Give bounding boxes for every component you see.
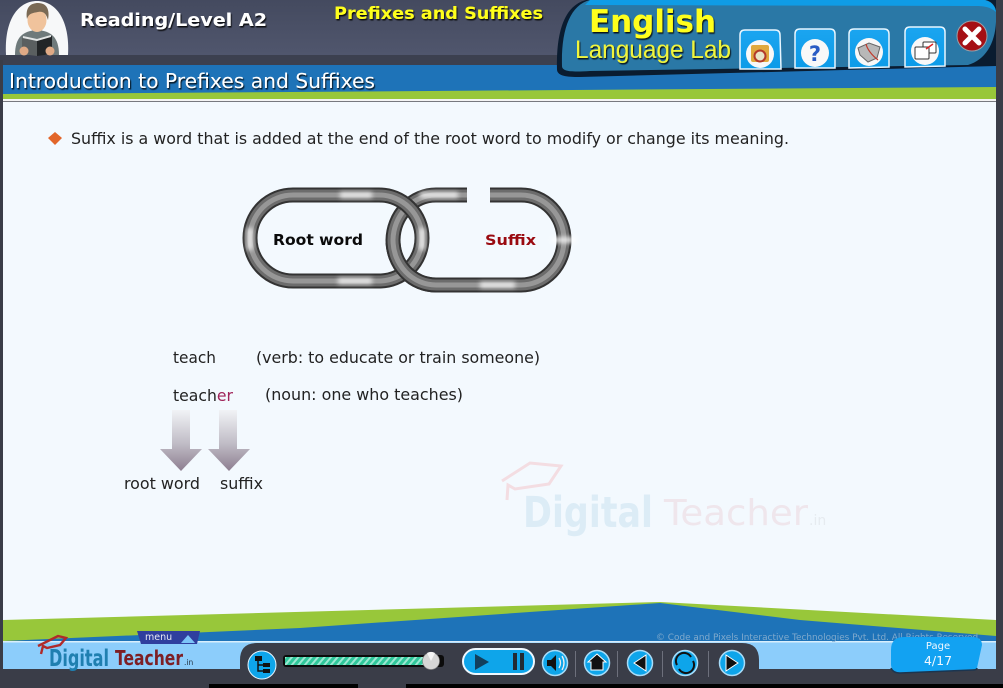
top header bar [0,0,1003,55]
page number: 4/17 [924,653,952,668]
icon: window button [905,27,945,67]
menu tab: menu [145,632,172,643]
digital teacher logo: Teacher [115,646,183,670]
heading: prefixes and suffixes: Prefixes and Suffixes [334,4,543,23]
copyright text: © Code and Pixels Interactive Technologies Pvt. Ltd. All Rights Reserved. [656,633,981,643]
digital teacher logo: .in [184,658,193,667]
icon: replay button [672,650,698,676]
media control bar [240,643,759,679]
icon: next button [720,650,744,676]
icon: student reading avatar [6,1,68,56]
bottom dark band [0,669,1003,683]
icon: close button [957,21,987,51]
chain link diagram [250,195,576,285]
icon: help button [795,29,835,68]
icon: previous button [628,650,652,676]
watermark logo: .in [809,513,826,529]
title banner [3,65,996,102]
left chain link: root word [250,195,422,281]
english language lab badge [557,0,996,77]
left frame edge [0,60,3,684]
heading: introduction: Introduction to Prefixes and Suffixes [9,69,375,93]
interlocked front section of right link [386,243,436,292]
heading: reading level: Reading/Level A2 [80,11,267,31]
label: root word: Root word [273,231,363,249]
example: teach definition: (verb: to educate or train someone) [256,349,540,367]
icon: volume button [542,650,568,676]
definition text: Suffix is a word that is added at the end of the root word to modify or change its meaning. [71,130,789,148]
label: suffix: suffix [220,475,263,493]
progress bar [283,652,444,670]
icon: home button [584,650,610,676]
arrow: root word [160,410,202,471]
example: teach: teach [173,349,216,367]
page label: Page [926,641,950,652]
digital teacher logo [38,636,193,672]
menu tab [137,631,200,644]
example: teacher: teacher [173,387,234,405]
icon: folder clock button [740,30,781,69]
icon: help button: ? [809,42,821,66]
watermark logo: Teacher [663,493,808,534]
arrow: suffix [208,410,250,471]
example: teacher definition: (noun: one who teaches) [265,386,463,404]
icon: menu tree button [248,651,276,679]
label: suffix: Suffix [485,233,537,249]
watermark logo [502,463,826,538]
content panel [3,102,996,632]
english wordmark: English [589,4,716,40]
page indicator [891,637,982,673]
right chain link: suffix [393,195,576,285]
play and pause button [463,649,534,674]
watermark logo: Digital [523,488,653,538]
icon: orange bullet diamond [48,132,62,145]
digital teacher logo: Digital [49,646,109,672]
icon: book button [849,29,889,68]
footer wave [3,602,996,669]
label: root word: root word [124,475,200,493]
language lab wordmark: Language Lab [575,36,731,64]
right frame edge [996,0,1003,684]
